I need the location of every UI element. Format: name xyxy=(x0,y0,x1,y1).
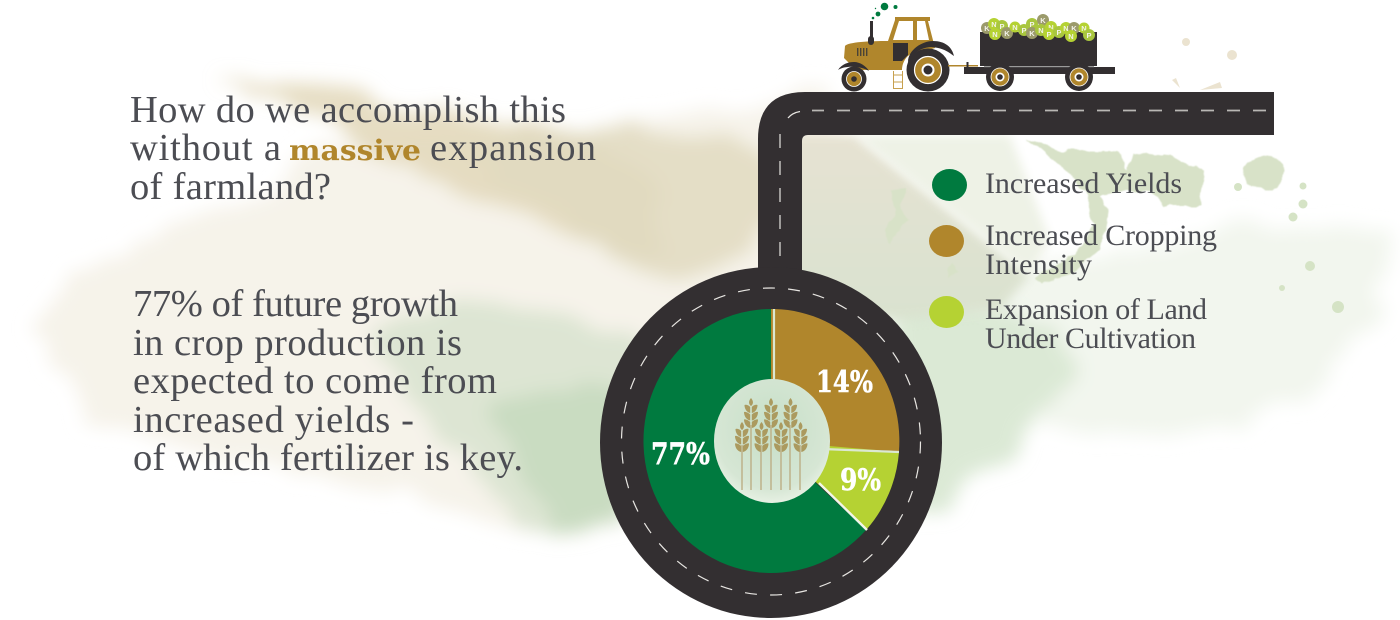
legend item: increased cropping intensity xyxy=(929,219,1217,281)
fertilizer balls: K xyxy=(984,24,990,33)
icon: wheat xyxy=(735,398,808,490)
heading question: How do we accomplish this xyxy=(130,89,566,131)
trailer xyxy=(980,32,1097,66)
value: 14%: 14% xyxy=(816,365,873,400)
fertilizer balls: N xyxy=(991,20,997,29)
segment: increased yields 77% xyxy=(643,309,866,573)
fertilizer balls: N xyxy=(1012,23,1018,32)
body text: in crop production is xyxy=(133,322,462,364)
fertilizer balls: K xyxy=(1004,29,1010,38)
fertilizer balls: N xyxy=(1068,32,1074,41)
center circle xyxy=(714,379,830,503)
exhaust smoke xyxy=(872,3,898,19)
legend item: increased yields: Increased Yields xyxy=(985,167,1182,200)
fertilizer balls: N xyxy=(1063,24,1069,33)
fertilizer balls: P xyxy=(1056,28,1062,37)
fertilizer balls xyxy=(981,14,1095,42)
tractor wheels xyxy=(906,48,950,92)
fertilizer balls: K xyxy=(1029,29,1035,38)
body text: of which fertilizer is key. xyxy=(133,437,523,479)
road xyxy=(600,92,1274,618)
heading question: expansion xyxy=(430,127,596,169)
heading question xyxy=(130,89,596,208)
legend item: expansion of land: Expansion of Land xyxy=(985,293,1207,326)
fertilizer balls: N xyxy=(992,30,998,39)
body text: expected to come from xyxy=(133,360,497,402)
donut chart xyxy=(643,309,899,573)
value: 9%: 9% xyxy=(840,463,881,498)
trailer wheels xyxy=(986,63,1014,91)
legend item: increased cropping intensity: Intensity xyxy=(985,248,1092,281)
fertilizer balls: N xyxy=(1081,24,1087,33)
ladder xyxy=(894,71,902,89)
segment: increased cropping intensity 14% xyxy=(771,309,899,451)
tractor body xyxy=(844,17,935,70)
fertilizer balls: P xyxy=(999,22,1005,31)
segment: expansion of land 9% xyxy=(771,441,899,529)
fertilizer balls: P xyxy=(1029,20,1035,29)
hitch xyxy=(948,65,978,66)
fertilizer balls: N xyxy=(1048,23,1054,32)
heading question: without a xyxy=(130,127,281,169)
fertilizer balls: K xyxy=(1071,24,1077,33)
body text: 77% of future growth xyxy=(133,283,458,325)
heading question: of farmland? xyxy=(130,166,331,208)
fertilizer balls: N xyxy=(1038,26,1044,35)
legend item: increased cropping intensity: Increased Cropping xyxy=(985,219,1217,252)
heading question: massive xyxy=(289,134,421,167)
legend item: expansion of land: Under Cultivation xyxy=(985,322,1196,355)
watercolor background xyxy=(35,38,1387,540)
icon: tractor with trailer xyxy=(838,3,1115,92)
legend xyxy=(929,167,1217,355)
fertilizer balls: P xyxy=(1086,31,1092,40)
body text: increased yields - xyxy=(133,399,414,441)
legend item: expansion of land xyxy=(929,293,1207,355)
fertilizer balls: K xyxy=(1040,16,1046,25)
value: 77%: 77% xyxy=(651,437,710,472)
fertilizer balls: P xyxy=(1046,30,1052,39)
body text xyxy=(133,283,523,479)
fertilizer balls: P xyxy=(1021,26,1027,35)
